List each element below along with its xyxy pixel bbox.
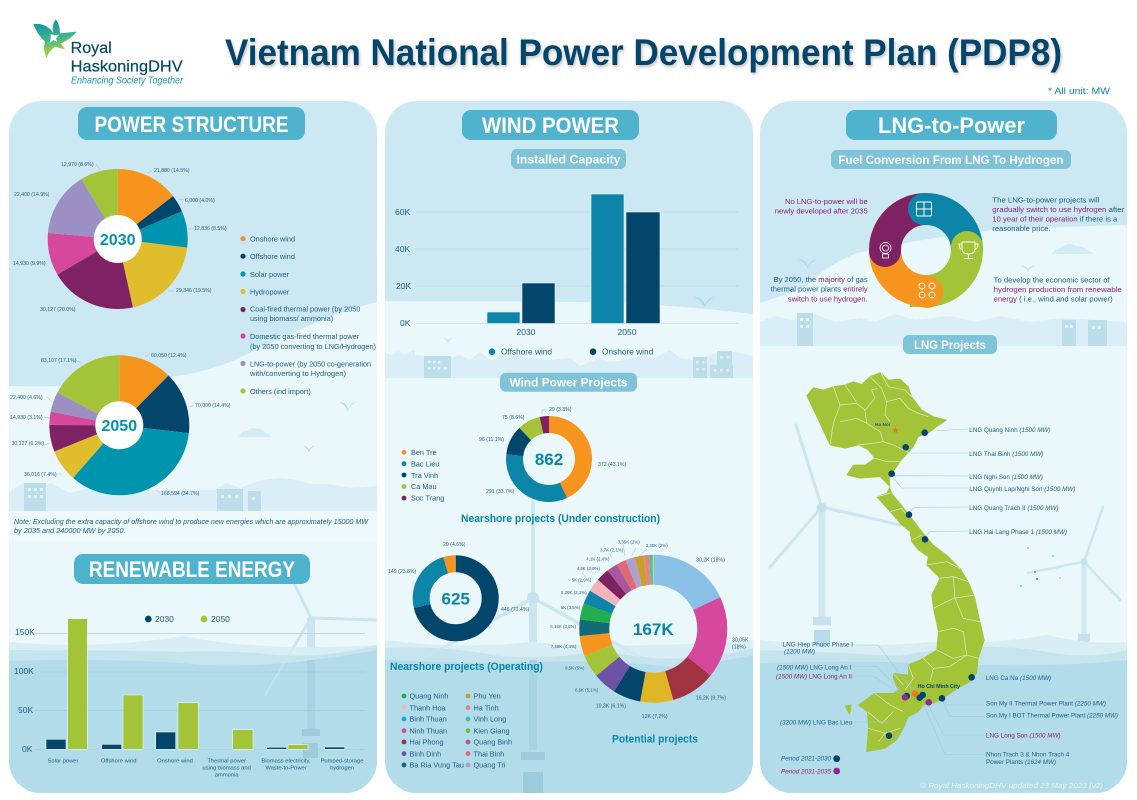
markers: 2021-2030 projects [886, 429, 975, 739]
legend: power structure: Hydropower [250, 287, 290, 296]
map labels: LNG Quang Trach II (1500 MW) [969, 505, 1059, 512]
donut chart: operating 625: 149 (23.8%) [388, 569, 417, 575]
callout: hydrogen production sector: To develop the economic sector of [994, 275, 1111, 284]
legend: provinces: Kien Giang [474, 726, 510, 735]
bar chart: renewable energy: 100K [14, 666, 34, 676]
map: Vietnam LNG projects [807, 372, 1061, 754]
legend: under construction: Soc Trang [411, 494, 444, 503]
legend: power structure: with/converting to Hydrogen) [249, 369, 346, 378]
donut chart: potential projects 167K: 5,26K (3,1%) [561, 590, 587, 595]
map labels: Son My I BOT Thermal Power Plant (2250 MW) [986, 712, 1118, 720]
pie chart 2050: 36,016 (7.4%) [24, 472, 57, 478]
donut chart: operating 625 [388, 542, 530, 633]
pie chart 2030: 29,346 (19.5%) [176, 288, 212, 294]
donut chart: potential projects 167K: 10,3K (6,1%) [596, 704, 626, 710]
subheading: wind power projects: Wind Power Projects [510, 376, 628, 390]
bar chart: installed capacity: 2050 [618, 327, 637, 337]
donut chart: potential projects 167K: 8,5K (5%) [565, 666, 585, 670]
callout: by 2050 gas plants switch: switch to use hydrogen. [788, 295, 868, 304]
donut chart: under construction 862: 29 (3.3%) [549, 407, 572, 413]
callout: no new LNG after 2035: No LNG-to-power will be [785, 197, 868, 206]
bar chart: renewable energy: 2050 [211, 614, 230, 624]
callout: gradual switch to hydrogen: gradually switch to use hydrogen after [992, 205, 1125, 214]
pie chart 2050: 168,594 (34.7%) [161, 491, 200, 497]
country outline and provinces [807, 372, 984, 752]
logo: Royal HaskoningDHV: Enhancing Society Together [71, 76, 184, 86]
pie chart 2030: 14,930 (9.9%) [13, 261, 46, 267]
pie chart 2030 [13, 162, 227, 313]
legend: provinces [402, 692, 512, 770]
bar chart: installed capacity: 60K [395, 207, 410, 217]
donut chart: operating 625: 625 [442, 590, 470, 608]
heading: power structure: POWER STRUCTURE [94, 112, 288, 137]
legend: provinces: Ninh Thuan [410, 726, 447, 735]
note: offshore wind excluded capacity [14, 517, 369, 535]
bar chart: renewable energy: 0K [22, 744, 33, 754]
icon: trophy [959, 242, 978, 258]
bar chart: installed capacity: 0K [400, 318, 411, 328]
bar chart: renewable energy [14, 614, 365, 778]
leader lines [850, 429, 984, 754]
pie chart 2030: 12,836 (8.5%) [194, 226, 227, 232]
callout: by 2050 gas plants switch: By 2050, the majority of gas [774, 275, 868, 284]
legend: provinces: Quang Ninh [410, 692, 448, 701]
callout: no new LNG after 2035: newly developed after 2035 [775, 206, 868, 216]
donut chart: potential projects 167K: 3,35K (2%) [618, 540, 640, 544]
map labels: LNG Long Son (1500 MW) [986, 732, 1061, 740]
logo: Royal HaskoningDHV [33, 19, 184, 87]
pie chart 2030: 22,400 (14.9%) [14, 192, 50, 198]
legend: provinces: Binh Dinh [410, 749, 441, 758]
bar chart: renewable energy: Pumped-storage [321, 758, 363, 764]
label: nearshore projects under construction: Nearshore projects (Under construction) [461, 513, 660, 525]
legend: under construction: Ben Tre [411, 448, 437, 457]
markers: 2031-2035 projects [902, 694, 932, 706]
legend: power structure: Offshore wind [250, 252, 295, 261]
copyright: © Royal HaskoningDHV updated 23 May 2023 (v2) [920, 781, 1104, 790]
bar chart: renewable energy: 150K [15, 627, 35, 637]
legend: provinces: Phu Yen [474, 692, 501, 701]
unit note: * All unit: MW [1048, 86, 1110, 97]
donut chart: potential projects 167K: 6,16K (3,6%) [550, 624, 576, 629]
map labels: LNG Hiep Phuoc Phase I [783, 642, 853, 648]
map labels: Power Plants (1624 MW) [986, 759, 1056, 766]
note: offshore wind excluded capacity: Note: Excluding the extra capacity of offshore wind to produce new energies which are approximately 15000 MW [14, 517, 369, 526]
callout: hydrogen production sector [994, 275, 1122, 304]
donut chart: potential projects 167K: 8,6K (5,1%) [575, 688, 599, 692]
donut chart: potential projects 167K: 16,2K (9,7%) [696, 696, 726, 702]
heading: LNG-to-power: LNG-to-Power [878, 113, 1025, 138]
map labels: LNG Nghi Son (1500 MW) [969, 474, 1043, 481]
bar chart: renewable energy: ammonia [215, 772, 239, 778]
legend: provinces: Ba Ria Vung Tau [410, 761, 464, 770]
pie chart 2030: 2030 [100, 232, 136, 249]
heading: power structure [78, 107, 305, 140]
legend: provinces: Quang Binh [474, 738, 512, 747]
icon: light bulb [880, 242, 891, 258]
bar chart: installed capacity: Onshore wind [602, 347, 654, 357]
subheading: installed capacity [511, 149, 626, 169]
callout: by 2050 gas plants switch [771, 275, 868, 304]
bar chart: installed capacity: 2030 [517, 327, 536, 337]
legend: provinces: Thanh Hoa [410, 703, 447, 712]
map labels: LNG Hai Lang Phase 1 (1500 MW) [969, 529, 1067, 536]
panel: power structure and renewable energy [9, 101, 377, 793]
title: Vietnam National Power Development Plan (PDP8) [225, 32, 1062, 73]
legend: project periods [781, 755, 840, 776]
map labels: Nhon Trach 3 & Nhon Trach 4 [986, 752, 1070, 758]
heading: wind power: WIND POWER [482, 113, 619, 138]
legend: power structure: Onshore wind [250, 234, 295, 244]
bar chart: renewable energy: 50K [18, 705, 33, 715]
donut chart: potential projects 167K: 4,1K (2,4%) [586, 556, 610, 562]
legend: provinces: Ha Tinh [474, 703, 499, 712]
callout: hydrogen production sector: energy ( i.e., wind and solar power) [994, 295, 1113, 304]
legend: project periods: Period 2031-2035 [781, 768, 832, 776]
donut chart: potential projects 167K: 4,9K (2,9%) [577, 566, 600, 571]
donut chart: operating 625: 29 (4.6%) [443, 542, 466, 548]
donut chart: potential projects 167K [550, 540, 749, 720]
map labels: (1500 MW) LNG Long An II [776, 674, 852, 680]
callout: no new LNG after 2035 [775, 197, 868, 216]
logo: Royal HaskoningDHV: HaskoningDHV [71, 58, 183, 76]
legend: project periods: Period 2021-2030 [781, 756, 832, 762]
pie chart 2050: 2050 [102, 418, 137, 435]
bar chart: renewable energy: Solar power [48, 758, 79, 764]
donut chart: potential projects 167K: (18%) [732, 644, 746, 650]
pie chart 2050: 14,930 (3.1%) [10, 415, 43, 421]
legend: power structure: (by 2050 converting to LNG/Hydrogen) [250, 342, 376, 351]
callout: gradual switch to hydrogen: The LNG-to-power projects will [992, 195, 1100, 204]
heading: wind power [462, 110, 639, 140]
subheading: installed capacity: Installed Capacity [516, 152, 621, 166]
bar chart: installed capacity: 40K [395, 244, 410, 254]
donut chart: potential projects 167K: 3,35K (2%) [646, 543, 668, 548]
offshore islands [1020, 547, 1061, 587]
map labels: (3200 MW) LNG Bac Lieu [780, 720, 853, 726]
map labels: LNG Quynh Lap/Nghi Son (1500 MW) [969, 486, 1075, 493]
pie chart 2050: 30,127 (6.2%) [12, 441, 44, 447]
map labels: LNG Ca Na (1500 MW) [986, 675, 1051, 682]
legend: power structure: Solar power [250, 270, 290, 279]
marker: Hanoi: Ha Noi [875, 422, 890, 428]
donut chart: potential projects 167K: 167K [633, 620, 674, 639]
legend: power structure: Coal-fired thermal power (by 2050 [250, 304, 360, 314]
label: potential projects: Potential projects [612, 734, 698, 746]
marker: Ho Chi Minh City [912, 684, 960, 697]
note: offshore wind excluded capacity: by 2035 and 240000 MW by 2050. [14, 526, 126, 535]
bar chart: installed capacity [395, 194, 738, 357]
donut chart: under construction 862 [479, 407, 627, 495]
map labels: LNG Thai Binh (1500 MW) [969, 451, 1043, 458]
icon: solar panel [916, 202, 932, 216]
donut chart: under construction 862: 96 (11.1%) [479, 437, 504, 443]
bar chart: renewable energy: 2030 [155, 614, 174, 624]
pie chart 2050: 83,107 (17.1%) [41, 358, 77, 364]
subheading: wind power projects [500, 373, 637, 392]
bar chart: renewable energy: using biomass and [203, 766, 251, 772]
map labels: LNG Quang Ninh (1500 MW) [969, 427, 1051, 434]
callout: gradual switch to hydrogen: reasonable price. [992, 224, 1051, 233]
donut chart: potential projects 167K: 12K (7,2%) [642, 714, 668, 720]
donut chart: potential projects 167K: 30,2K (18%) [696, 558, 725, 564]
bar chart: renewable energy: Waste-to-Power [265, 766, 307, 772]
donut: fuel conversion cycle [869, 193, 983, 308]
bar chart: renewable energy: Thermal power [207, 758, 246, 764]
heading: renewable energy: RENEWABLE ENERGY [89, 557, 295, 582]
map labels [776, 427, 1118, 766]
map labels: (1500 MW) LNG Long An I [777, 664, 851, 672]
legend: power structure: using biomass/ ammonia) [250, 314, 333, 323]
legend: provinces: Binh Thuan [410, 715, 447, 724]
legend: under construction: Tra Vinh [411, 471, 438, 480]
donut chart: potential projects 167K: 3,7K (2,1%) [600, 548, 624, 552]
legend: provinces: Quang Tri [474, 761, 506, 770]
donut chart: under construction 862: 862 [535, 450, 563, 469]
bar chart: renewable energy: Biomass electricity, [261, 758, 311, 764]
subheading: LNG projects [903, 335, 997, 354]
legend: provinces: Hai Phong [410, 738, 444, 747]
legend: power structure: LNG-to-power (by 2050 co-generation [250, 360, 371, 368]
heading: LNG-to-power [846, 110, 1057, 140]
pie chart 2050: 22,400 (4.6%) [10, 395, 43, 401]
legend: provinces: Vinh Long [474, 715, 506, 724]
donut chart: potential projects 167K: 5K (2,9%) [572, 578, 592, 582]
donut chart: under construction 862: 291 (33.7%) [486, 489, 515, 495]
donut chart: potential projects 167K: 30,05K [732, 638, 749, 644]
pie chart 2050: 70,000 (14.4%) [195, 403, 231, 409]
map labels: (1200 MW) [784, 648, 815, 656]
bar chart: renewable energy: Offshore wind [101, 758, 137, 764]
subheading: fuel conversion: Fuel Conversion From LNG To Hydrogen [838, 153, 1064, 167]
legend: power structure [240, 234, 376, 396]
pie chart 2030: 30,127 (20.0%) [40, 307, 76, 313]
donut chart: operating 625: 446 (71.4%) [501, 607, 530, 613]
label: nearshore projects operating: Nearshore projects (Operating) [390, 661, 543, 673]
map labels: Son My II Thermal Power Plant (2250 MW) [986, 700, 1106, 708]
bar chart: renewable energy: Onshore wind [157, 758, 193, 764]
legend: power structure: Others (ind import) [250, 387, 311, 396]
subheading: LNG projects: LNG Projects [914, 338, 986, 352]
legend: under construction [402, 448, 444, 503]
donut chart: potential projects 167K: 7,46K (4,4%) [551, 644, 577, 649]
donut chart: under construction 862: 372 (43.1%) [598, 462, 627, 468]
marker: Ho Chi Minh City: Ho Chi Minh City [918, 684, 960, 690]
bar chart: installed capacity: 20K [396, 281, 411, 291]
callout: hydrogen production sector: hydrogen production from renewable [994, 285, 1122, 294]
icon: circular nodes [919, 283, 935, 298]
pie chart 2030: 6,000 (4.0%) [185, 198, 215, 204]
bar chart: renewable energy: hydrogen [330, 766, 354, 772]
pie chart 2050 [10, 353, 231, 497]
legend: power structure: Domestic gas-fired thermal power [250, 332, 360, 341]
panel: wind power [385, 101, 753, 793]
pie chart 2030: 21,880 (14.5%) [154, 168, 190, 174]
legend: under construction: Bac Lieu [411, 459, 439, 468]
legend: provinces: Thai Binh [474, 749, 504, 758]
logo: Royal HaskoningDHV: Royal [71, 40, 112, 57]
bar chart: installed capacity: Offshore wind [501, 347, 552, 357]
donut chart: potential projects 167K: 6K (3,5%) [561, 605, 581, 610]
pie chart 2030: 12,970 (8.6%) [61, 162, 94, 168]
donut chart: under construction 862: 75 (8.6%) [502, 415, 525, 421]
legend: under construction: Ca Mau [411, 482, 437, 491]
callout: by 2050 gas plants switch: thermal power plants entirely [771, 285, 868, 294]
pie chart 2050: 60,050 (12.4%) [151, 353, 187, 359]
callout: gradual switch to hydrogen [992, 195, 1125, 233]
marker: Hanoi [875, 422, 898, 433]
panel: LNG-to-power [760, 101, 1127, 793]
callout: gradual switch to hydrogen: 10 year of their operation if there is a [992, 215, 1118, 224]
